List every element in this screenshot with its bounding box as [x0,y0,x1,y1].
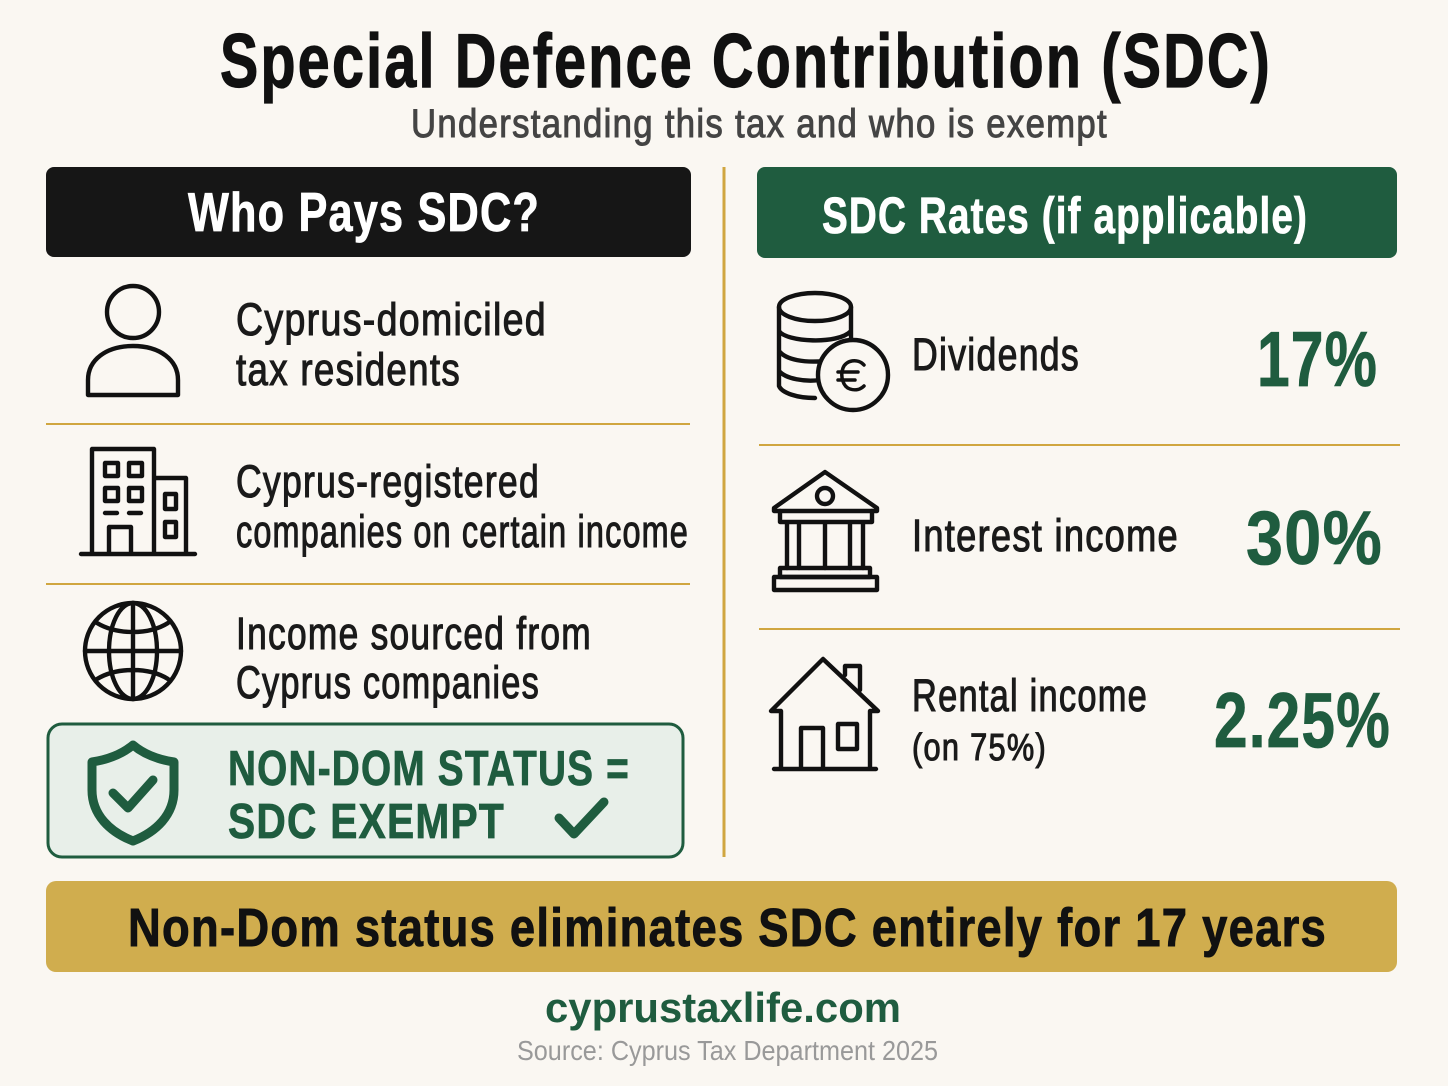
label: rental income on 75% [912,670,1148,769]
text: Cyprus-registered companies: companies on certain income [236,506,689,557]
icon: person [88,286,178,395]
label: rental income on 75%: Rental income [912,670,1148,721]
rate: 2.25%: 2.25% [1214,676,1391,764]
rate: 30%: 30% [1246,496,1383,581]
text: Cyprus-domiciled tax residents: Cyprus-domiciled [236,294,547,345]
text: Cyprus-registered companies [236,456,689,557]
panel: SDC rates [757,167,1400,769]
text: Income sourced from Cyprus companies [236,608,592,708]
label: interest income: Interest income [912,510,1179,561]
website: cyprustaxlife.com [545,984,901,1031]
source: Source: Cyprus Tax Department 2025 [517,1035,938,1066]
panel: who pays SDC [46,167,691,857]
text: Income sourced from Cyprus companies: Income sourced from [236,608,592,659]
rate: 17%: 17% [1257,315,1378,403]
icon: office buildings [81,449,195,554]
icon: check mark [559,802,604,834]
heading: who pays: Who Pays SDC? [188,181,540,243]
label: dividends: Dividends [912,329,1080,380]
icon: house [771,659,878,769]
icon: globe [85,603,181,699]
text: Cyprus-domiciled tax residents [236,294,547,395]
heading: SDC rates: SDC Rates (if applicable) [822,187,1308,244]
callout text: SDC EXEMPT [228,795,505,849]
banner: key takeaway [46,881,1397,972]
icon: bank [774,472,877,590]
callout text: NON-DOM STATUS = [228,742,630,796]
text: Income sourced from Cyprus companies: Cyprus companies [236,657,540,708]
subtitle: Understanding this tax and who is exempt [411,102,1108,146]
callout: non-dom exempt [48,724,683,857]
icon: shield with check [92,745,174,841]
label: rental income on 75%: (on 75%) [912,727,1047,769]
heading: who pays [46,167,691,257]
text: Cyprus-registered companies: Cyprus-registered [236,456,540,507]
icon: coins with euro [779,293,888,410]
callout text [228,742,630,849]
text: Cyprus-domiciled tax residents: tax residents [236,344,461,395]
heading: SDC rates [757,167,1397,258]
